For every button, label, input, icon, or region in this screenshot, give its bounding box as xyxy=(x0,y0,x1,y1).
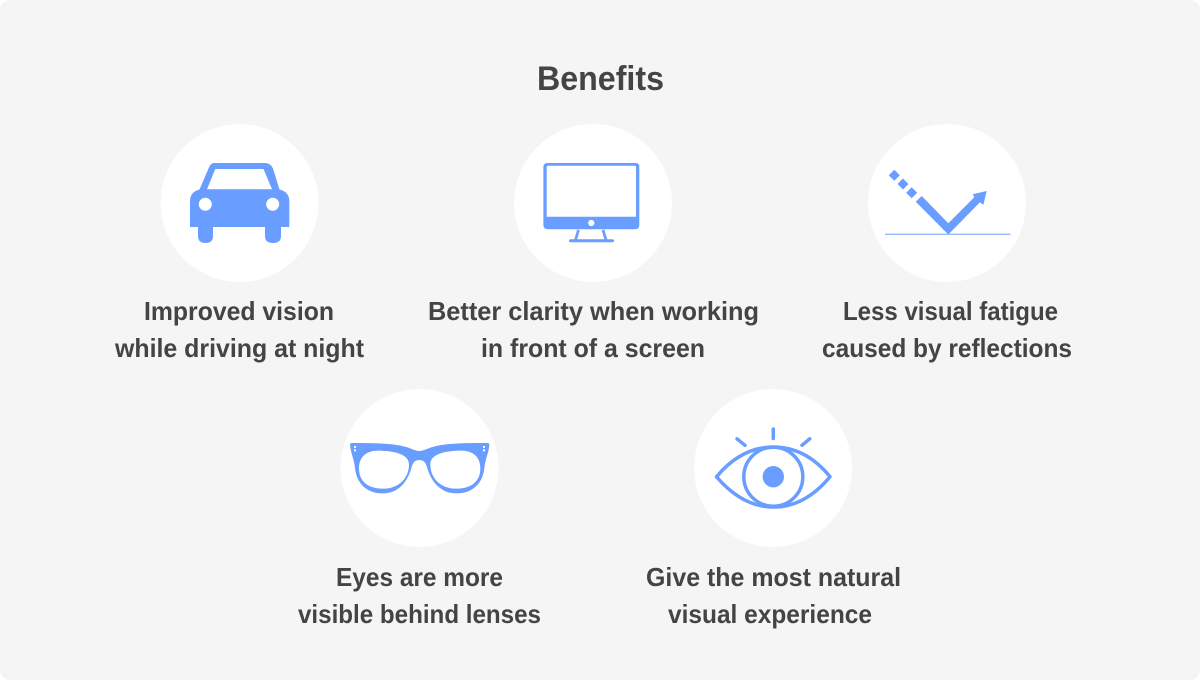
label: natural experience: visual experience xyxy=(668,599,872,629)
label: night driving xyxy=(114,296,364,363)
benefit: visible eyes xyxy=(298,389,541,629)
label: screen clarity xyxy=(428,296,759,363)
label: visible eyes xyxy=(298,562,541,629)
label: natural experience xyxy=(646,562,901,629)
benefit: less reflections xyxy=(822,124,1072,363)
icon: monitor xyxy=(514,124,672,282)
title: Benefits xyxy=(537,60,664,98)
label: screen clarity: Better clarity when working xyxy=(428,296,759,326)
label: screen clarity: in front of a screen xyxy=(481,333,705,363)
icon: eye xyxy=(694,389,852,547)
benefit: screen clarity xyxy=(428,124,759,363)
label: natural experience: Give the most natural xyxy=(646,562,901,592)
label: less reflections: caused by reflections xyxy=(822,333,1072,363)
label: night driving: Improved vision xyxy=(144,296,334,326)
label: visible eyes: visible behind lenses xyxy=(298,599,541,629)
benefit: natural experience xyxy=(646,389,901,629)
label: night driving: while driving at night xyxy=(114,333,364,363)
label: less reflections: Less visual fatigue xyxy=(843,296,1058,326)
icon: glasses xyxy=(340,389,498,547)
icon: reflection arrow xyxy=(868,124,1026,282)
benefit: night driving xyxy=(114,124,364,363)
label: visible eyes: Eyes are more xyxy=(336,562,503,592)
label: less reflections xyxy=(822,296,1072,363)
icon: car xyxy=(160,124,318,282)
